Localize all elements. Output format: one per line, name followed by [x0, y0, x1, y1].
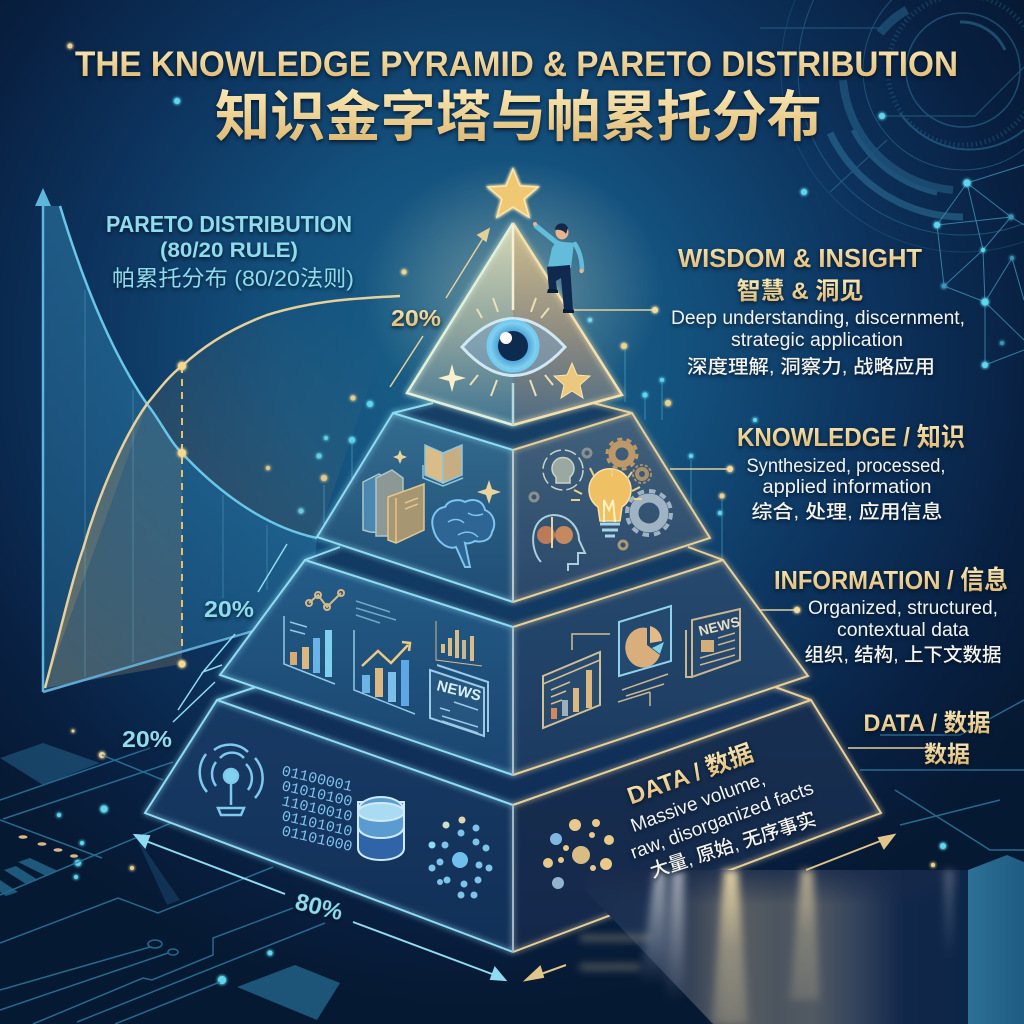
icon: sparkle on tier	[438, 364, 466, 392]
label: wisdom and insight: strategic application	[731, 330, 903, 351]
icon: head with brain	[533, 515, 585, 571]
icon: gold bars	[436, 621, 482, 666]
tech rings top right	[760, 0, 1024, 252]
icon: small line graph	[306, 590, 344, 610]
label: knowledge: Synthesized, processed,	[746, 456, 946, 477]
label: 20 percent gold: 20%	[391, 305, 441, 331]
leader lines	[574, 307, 925, 748]
pareto heading: (80/20 RULE)	[160, 239, 298, 262]
pareto heading	[106, 211, 354, 291]
tier: wisdom	[407, 169, 622, 425]
pareto heading: PARETO DISTRIBUTION	[106, 211, 352, 237]
icon: database	[358, 797, 404, 860]
label: information: INFORMATION / 信息	[774, 565, 1008, 595]
icon: big bulb	[589, 469, 631, 536]
tier: information	[220, 547, 808, 775]
icon: gears	[530, 439, 671, 549]
title: THE KNOWLEDGE PYRAMID & PARETO DISTRIBUTION	[75, 45, 958, 84]
tier: knowledge	[317, 403, 710, 602]
icon: top star	[488, 169, 538, 217]
label: 20 percent middle: 20%	[204, 596, 254, 622]
label: wisdom and insight: 智慧 & 洞见	[737, 278, 863, 305]
icon: signal antenna	[200, 745, 263, 815]
label: information: contextual data	[837, 620, 969, 641]
icon: pie panel	[618, 606, 671, 706]
visual glitch band lower right	[580, 855, 1024, 1024]
network graph right	[937, 165, 1024, 365]
icon: rising chart	[354, 630, 415, 714]
title: 知识金字塔与帕累托分布	[215, 86, 822, 148]
label: information: 组织, 结构, 上下文数据	[804, 644, 1002, 666]
icon: news left	[430, 665, 488, 736]
data face text: Massive volume,	[628, 769, 768, 837]
label: data	[864, 710, 990, 767]
arrow: lower	[173, 682, 215, 722]
binary digits: 11010010	[280, 793, 354, 826]
icon: news right	[686, 609, 741, 677]
label: knowledge	[737, 422, 965, 523]
halo behind apex	[363, 160, 663, 420]
data face text	[624, 740, 819, 883]
data face text: DATA / 数据	[624, 740, 757, 810]
chart: pareto distribution curves	[35, 188, 400, 692]
binary digits: 01010100	[280, 778, 354, 811]
label: information	[774, 565, 1008, 666]
binary digits	[280, 763, 354, 856]
icon: eye	[462, 298, 565, 396]
tier: data	[145, 687, 881, 952]
binary digits: 01100001	[280, 763, 354, 796]
label: knowledge: 综合, 处理, 应用信息	[752, 501, 942, 523]
icon: brain	[432, 500, 494, 567]
icon: small star	[554, 363, 590, 398]
data face text: 大量, 原始, 无序事实	[647, 808, 819, 883]
circuit lines bottom	[0, 700, 1024, 1024]
label: 20 percent lower: 20%	[122, 726, 172, 752]
icon: bar chart one	[284, 616, 335, 684]
icon: sparkle small	[393, 450, 407, 464]
pareto heading: 帕累托分布 (80/20法则)	[112, 266, 354, 291]
label: wisdom and insight	[671, 243, 965, 378]
icon: news left: NEWS	[435, 677, 483, 705]
binary digits: 01101000	[280, 823, 354, 856]
icon: books	[363, 470, 424, 543]
arrow: middle	[178, 544, 287, 710]
icon: small bulb	[543, 450, 583, 490]
icon: bulb rays	[571, 468, 642, 500]
arrow: top 20 percent	[390, 229, 489, 387]
isometric tiles bottom left	[0, 743, 340, 1020]
title	[75, 45, 958, 148]
arrow: 80 percent base	[135, 835, 505, 980]
icon: news right: NEWS	[697, 613, 741, 639]
label: wisdom and insight: 深度理解, 洞察力, 战略应用	[687, 356, 935, 378]
percentage arrows	[122, 229, 894, 980]
label: information: Organized, structured,	[808, 598, 998, 619]
icon: text lines	[356, 601, 396, 623]
data face text: raw, disorganized facts	[628, 778, 817, 864]
label: 80 percent: 80%	[292, 889, 345, 926]
label: data: DATA / 数据	[864, 710, 990, 737]
icon: data cluster gold	[543, 819, 614, 889]
label: knowledge: KNOWLEDGE / 知识	[737, 422, 965, 452]
arrow: gold base right	[526, 835, 894, 980]
icon: open book	[423, 445, 463, 486]
binary digits: 01101010	[280, 808, 354, 841]
label: wisdom and insight: WISDOM & INSIGHT	[678, 243, 922, 273]
icon: data cluster blue	[428, 816, 492, 898]
label: wisdom and insight: Deep understanding, discernment,	[671, 308, 965, 329]
label: data: 数据	[924, 741, 970, 767]
icon: window chart	[543, 634, 610, 728]
label: knowledge: applied information	[762, 477, 932, 498]
icon: person climbing	[533, 222, 584, 313]
icon: sparkle	[477, 480, 501, 504]
